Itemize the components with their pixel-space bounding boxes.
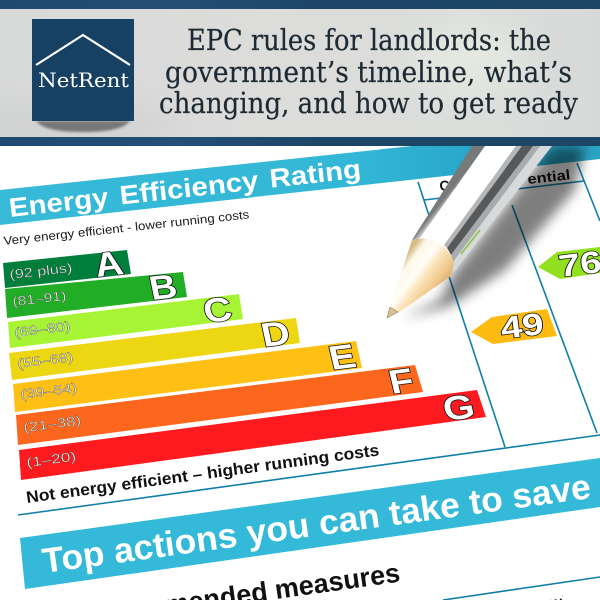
- icon: roof: [36, 35, 130, 65]
- pen illustration: [387, 146, 552, 318]
- pen tip: [387, 307, 398, 318]
- bar G: G: [439, 388, 479, 429]
- bottom stripe: [0, 137, 600, 146]
- bar B: B: [146, 267, 180, 308]
- logo square: [32, 19, 134, 121]
- bar D: [9, 314, 300, 380]
- bar F: [16, 362, 423, 445]
- title: government’s timeline, what’s: [165, 55, 572, 89]
- bar E: E: [325, 337, 360, 378]
- bar C: [8, 290, 243, 348]
- logo wordmark: NetRent: [38, 68, 129, 92]
- potential rating arrow: 76: [538, 247, 600, 279]
- document page: [0, 146, 600, 600]
- title: [159, 23, 579, 120]
- bar B: [5, 267, 187, 318]
- header band: [0, 0, 600, 146]
- banner: Energy Efficiency Rating: Energy Efficiency Rating: [7, 154, 362, 223]
- bar G: (1–20): [25, 449, 77, 470]
- bar B: (81–91): [12, 288, 67, 309]
- bar E: [13, 337, 362, 412]
- column heading: Potential: ential: [527, 166, 571, 187]
- bar E: (39–54): [19, 380, 78, 402]
- bar D: D: [258, 314, 293, 355]
- potential rating arrow: 76: 76: [557, 244, 600, 284]
- bar F: (21–38): [22, 413, 82, 435]
- logo: NetRent: [32, 19, 134, 132]
- caption: not energy efficient: Not energy efficient – higher running costs: [25, 441, 380, 507]
- table grid lines: [18, 163, 600, 515]
- header panel background: [0, 9, 600, 143]
- bar C: C: [200, 290, 235, 331]
- bar A: (92 plus): [9, 260, 73, 282]
- bar D: (55–68): [17, 349, 74, 371]
- current rating arrow: 49: [471, 309, 557, 344]
- current rating arrow: 49: 49: [499, 306, 546, 346]
- bar A: [3, 250, 131, 288]
- caption: very energy efficient: Very energy efficient - lower running costs: [3, 207, 250, 248]
- rule under measures heading: [443, 577, 600, 600]
- bar G: [19, 388, 486, 480]
- banner: Energy Efficiency Rating: [0, 146, 600, 225]
- rating bars: [3, 244, 486, 480]
- bar A: A: [91, 244, 126, 285]
- pen barrel: [412, 146, 552, 272]
- top stripe: [0, 0, 600, 9]
- banner: Top actions: Top actions you can take to save: [40, 467, 593, 581]
- pen nib cone: [390, 238, 454, 313]
- pen green reflection: [461, 230, 480, 254]
- title: EPC rules for landlords: the: [187, 23, 551, 57]
- bar F: F: [385, 362, 418, 402]
- column heading: Current: Current: [439, 172, 491, 194]
- logo shadow: [36, 121, 130, 132]
- bar C: (69–80): [14, 318, 71, 340]
- pen shadow: [403, 146, 585, 318]
